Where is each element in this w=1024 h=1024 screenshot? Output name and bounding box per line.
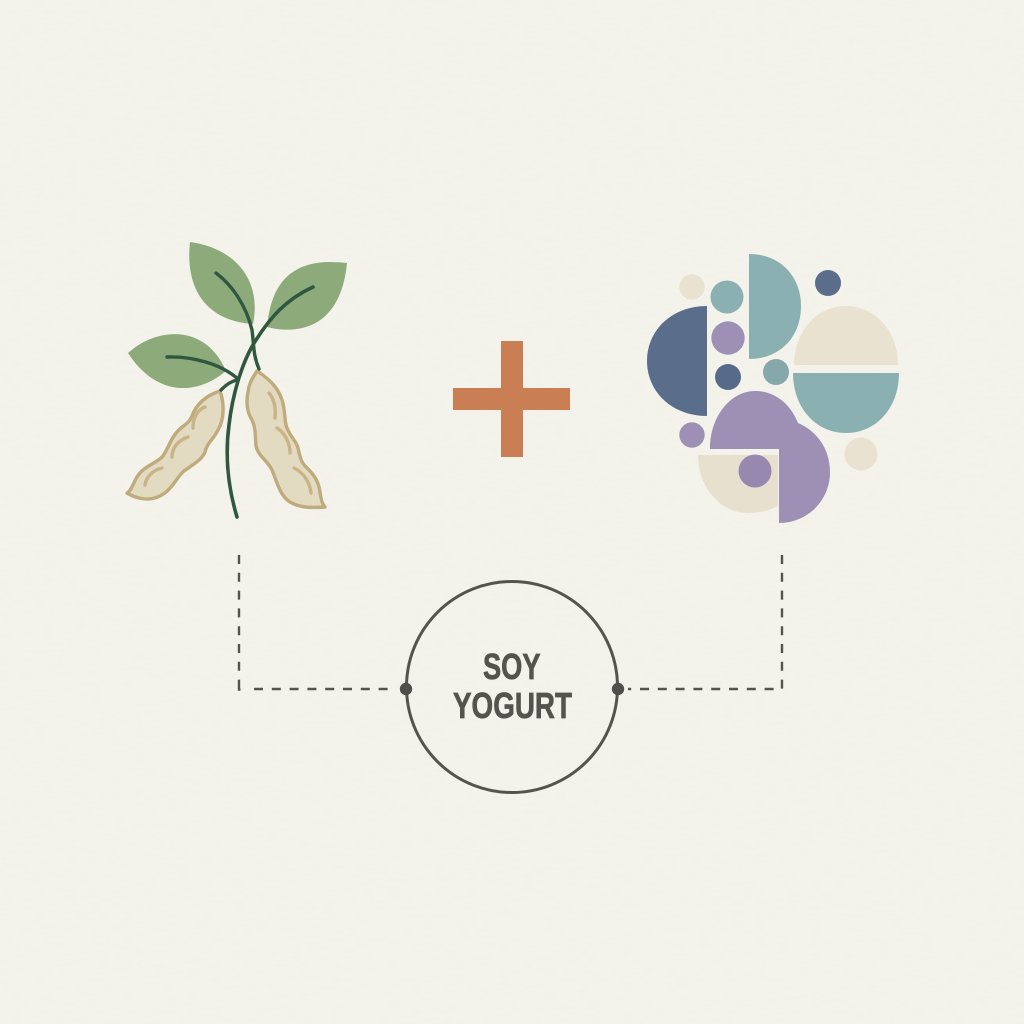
right leaf [267, 262, 347, 330]
stems and leaf veins [167, 273, 313, 517]
result circle [400, 582, 624, 792]
soybean plant illustration [127, 242, 347, 517]
plus sign [453, 341, 570, 457]
label: soy yogurt: YOGURT [453, 685, 572, 726]
connector dot: left [400, 683, 412, 695]
beige lower half circle [698, 455, 778, 513]
beige half circle [794, 306, 898, 365]
purple combined shape [710, 391, 830, 523]
dashed connector: left [239, 555, 388, 690]
teal half circle [749, 254, 801, 359]
abstract culture shapes illustration [647, 254, 899, 523]
pod seed marks [145, 393, 311, 493]
connector dot: right [612, 683, 624, 695]
left leaf [128, 334, 226, 388]
label: soy yogurt: SOY [483, 646, 540, 687]
top leaf [189, 242, 255, 324]
right pod [247, 371, 325, 507]
navy half circle [647, 306, 707, 416]
teal lower half circle [793, 373, 899, 433]
small circles [679, 274, 705, 300]
left pod [127, 391, 223, 499]
dashed connector: right [628, 555, 782, 689]
